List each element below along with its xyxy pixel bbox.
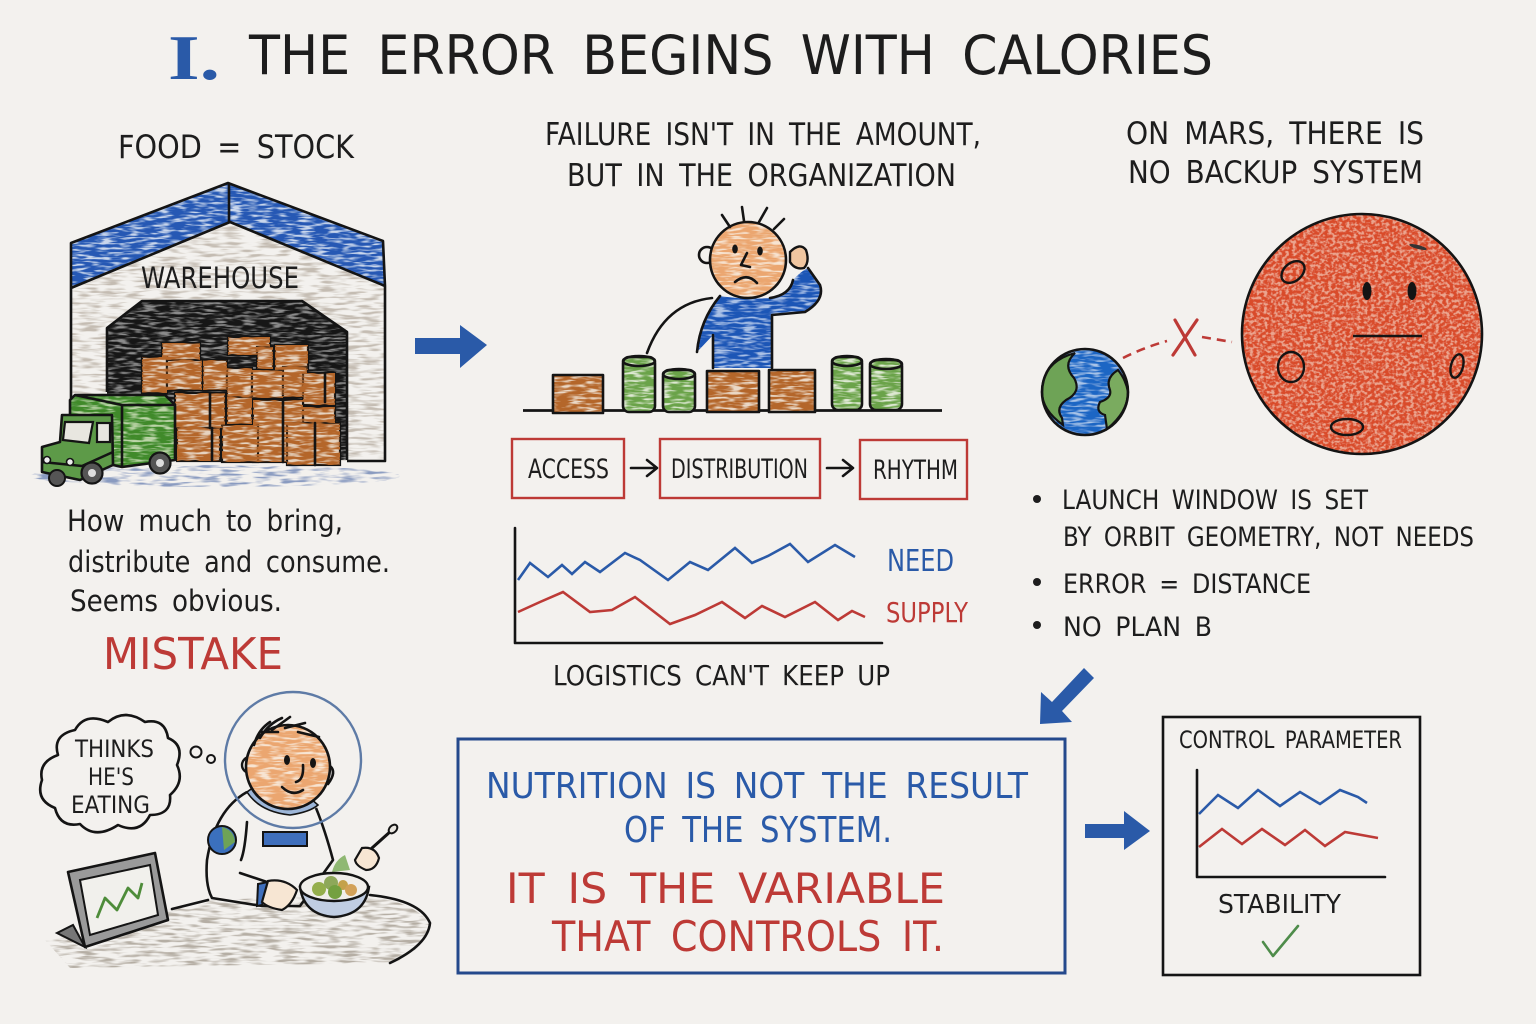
arrow: warehouse to organization <box>415 325 487 368</box>
stacked cardboard boxes <box>142 337 340 465</box>
conclusion box: NUTRITION IS NOT THE RESULT <box>486 766 1029 807</box>
warehouse illustration: WAREHOUSE <box>141 261 299 295</box>
thought bubble: thinks he's eating: HE'S <box>88 763 134 791</box>
thought bubble: thinks he's eating <box>40 715 215 832</box>
astronaut suit <box>207 792 333 906</box>
line chart: need vs supply: NEED <box>887 544 954 579</box>
panel: control parameter: CONTROL PARAMETER <box>1179 726 1402 754</box>
bowl of food <box>300 873 369 917</box>
illustration: mars <box>1242 214 1482 454</box>
illustration: earth <box>1042 349 1128 435</box>
table <box>45 895 430 968</box>
arrow: mars to conclusion <box>1040 668 1094 724</box>
text: how much to bring: Seems obvious. <box>70 584 282 618</box>
text: how much to bring: How much to bring, <box>67 504 343 538</box>
heading: failure: FAILURE ISN'T IN THE AMOUNT, <box>545 117 981 153</box>
illustration: confused person with food items <box>523 207 942 413</box>
heading: on mars: NO BACKUP SYSTEM <box>1128 155 1423 191</box>
bullet list: mars constraints: ERROR = DISTANCE <box>1063 569 1311 600</box>
bullet list: mars constraints: BY ORBIT GEOMETRY, NOT NEEDS <box>1063 522 1474 553</box>
ground shading <box>30 465 400 487</box>
head <box>242 717 333 809</box>
panel: control parameter: STABILITY <box>1218 890 1341 920</box>
thought bubble: thinks he's eating: THINKS <box>74 735 154 763</box>
line chart: need vs supply <box>515 528 969 643</box>
icon: green delivery truck <box>42 395 175 486</box>
conclusion box: IT IS THE VARIABLE <box>506 864 945 913</box>
title: THE ERROR BEGINS WITH CALORIES <box>248 24 1213 87</box>
heading: failure <box>545 117 981 194</box>
tablet <box>57 853 168 947</box>
name tag and mission patch <box>208 826 307 854</box>
helmet <box>225 692 361 828</box>
panel: control parameter <box>1163 717 1420 975</box>
spoon hand <box>355 823 399 870</box>
warehouse illustration <box>30 183 400 487</box>
flow: access, distribution, rhythm: ACCESS <box>528 454 609 485</box>
arm and hand <box>240 822 297 910</box>
title: I. <box>168 22 220 93</box>
conclusion box: OF THE SYSTEM. <box>624 810 892 851</box>
heading: on mars <box>1126 116 1424 191</box>
heading: failure: BUT IN THE ORGANIZATION <box>567 158 956 194</box>
heading: on mars: ON MARS, THERE IS <box>1126 116 1424 152</box>
broken link: earth to mars <box>1123 320 1232 358</box>
heading: food = stock: FOOD = STOCK <box>118 128 355 166</box>
illustration: astronaut eating at table with tablet <box>45 692 430 968</box>
caption: logistics: LOGISTICS CAN'T KEEP UP <box>553 659 890 692</box>
flow: access, distribution, rhythm: RHYTHM <box>873 455 958 486</box>
flow: access, distribution, rhythm <box>512 439 967 499</box>
arrow: conclusion to control parameter <box>1085 811 1150 850</box>
text: how much to bring: distribute and consume. <box>68 545 390 579</box>
label: mistake: MISTAKE <box>103 629 283 680</box>
bullet list: mars constraints: LAUNCH WINDOW IS SET <box>1062 485 1368 516</box>
line chart: need vs supply: SUPPLY <box>886 596 969 629</box>
conclusion box <box>458 739 1065 973</box>
flow: access, distribution, rhythm: DISTRIBUTION <box>671 454 808 485</box>
thought bubble: thinks he's eating: EATING <box>71 791 150 819</box>
bullet list: mars constraints: NO PLAN B <box>1063 612 1212 643</box>
text: how much to bring <box>67 504 390 618</box>
food boxes and cans <box>553 356 902 413</box>
bullet list: mars constraints <box>1033 485 1474 643</box>
conclusion box: THAT CONTROLS IT. <box>551 912 944 961</box>
